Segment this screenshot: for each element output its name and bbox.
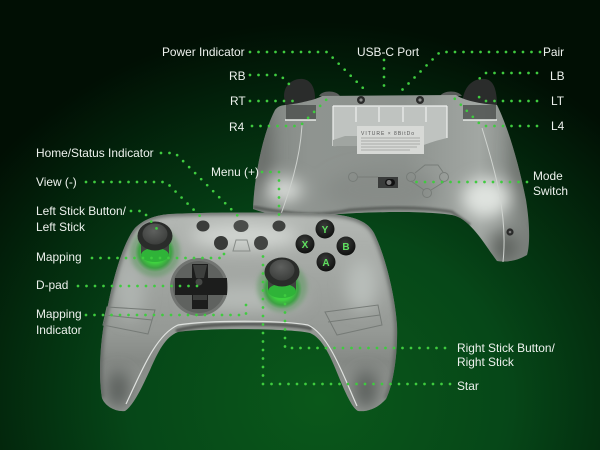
face buttons	[296, 220, 356, 272]
rear controller	[252, 79, 529, 264]
label: Right Stick Button / Right Stick: Right Stick Button/	[457, 341, 555, 355]
rear label plate: VITURE × 8BitDo	[361, 131, 415, 137]
label: Mode Switch: Mode	[533, 169, 563, 183]
label: RT: RT	[230, 94, 246, 108]
rear bumper right	[463, 79, 497, 106]
centre buttons	[196, 220, 286, 250]
mode switch	[378, 177, 398, 188]
label: Home/Status Indicator: Home/Status Indicator	[36, 146, 154, 160]
front trigger grips	[103, 305, 382, 335]
label: Mapping: Mapping	[36, 250, 82, 264]
rear shoulder bumps	[319, 92, 462, 96]
label: RB: RB	[229, 69, 246, 83]
label: View (-): View (-)	[36, 175, 77, 189]
face buttons: A	[322, 258, 330, 269]
rear trigger housings	[286, 105, 316, 120]
label: Left Stick Button / Left Stick: Left Stick	[36, 220, 85, 234]
label: Mapping Indicator: Indicator	[36, 323, 82, 337]
label: L4: L4	[551, 119, 565, 133]
rear label plate	[357, 126, 424, 154]
label: Power Indicator: Power Indicator	[162, 45, 245, 59]
rear bumper left	[284, 79, 315, 106]
face buttons: Y	[322, 225, 329, 236]
label: Menu (+): Menu (+)	[211, 165, 259, 179]
left stick	[130, 222, 180, 277]
rear body	[253, 95, 529, 261]
label: USB-C Port: USB-C Port	[357, 45, 420, 59]
right stick	[257, 258, 307, 312]
label: R4: R4	[229, 120, 245, 134]
rear centre bay	[333, 106, 447, 146]
label: D-pad: D-pad	[36, 278, 68, 292]
d-pad	[170, 258, 228, 316]
front controller	[100, 212, 397, 411]
centre emblem	[233, 240, 250, 251]
label: Pair: Pair	[543, 45, 564, 59]
rear screws and ports	[357, 96, 514, 236]
label: Mapping Indicator: Mapping	[36, 307, 82, 321]
face buttons: B	[342, 242, 350, 253]
label: LT: LT	[551, 94, 564, 108]
front body	[100, 212, 397, 411]
rear moulded details	[277, 125, 504, 262]
label: Star: Star	[457, 379, 479, 393]
face buttons: X	[302, 240, 309, 251]
label: Mode Switch: Switch	[533, 184, 568, 198]
label: LB: LB	[550, 69, 565, 83]
leader lines	[78, 52, 540, 384]
label: Right Stick Button / Right Stick: Right Stick	[457, 355, 514, 369]
label: Left Stick Button / Left Stick: Left Stick Button/	[36, 204, 126, 218]
